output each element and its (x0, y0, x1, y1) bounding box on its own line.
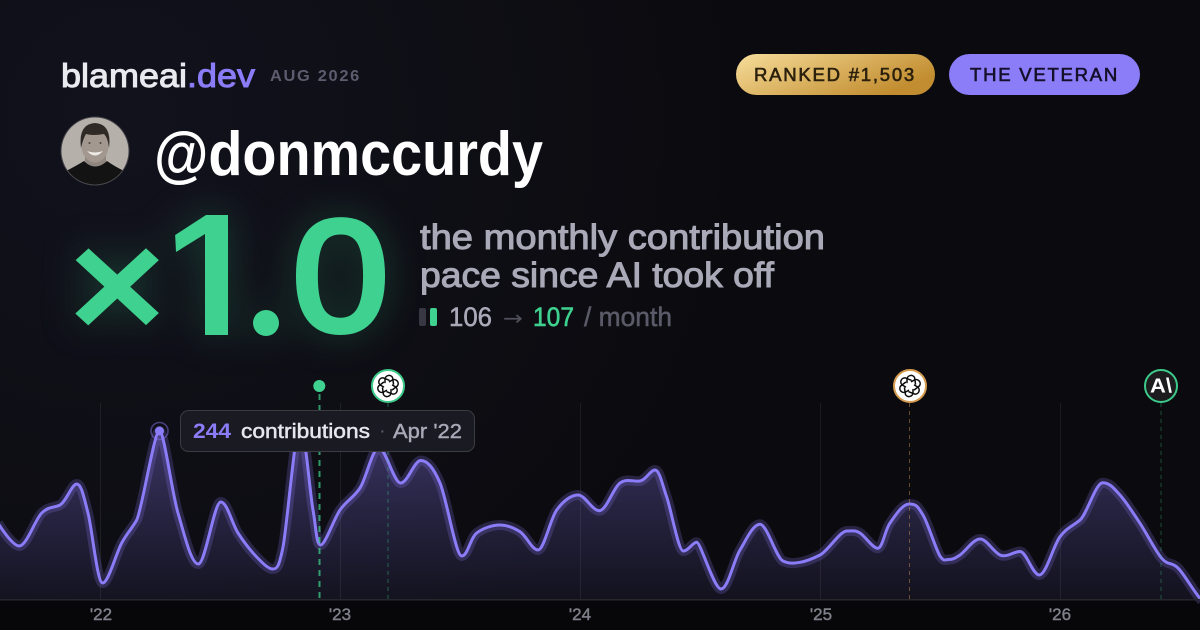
area chart: monthly contributions (0, 424, 1200, 601)
pace stats: → (503, 306, 523, 330)
multiplier: 0 (292, 188, 388, 364)
badge: rank (736, 54, 935, 95)
multiplier (73, 204, 400, 348)
pace stats: / month (584, 302, 672, 332)
tooltip: peak month: · (379, 420, 386, 442)
multiplier: 1 (166, 182, 261, 372)
pace stats: 106 (449, 302, 492, 332)
description (420, 218, 825, 295)
avatar (60, 116, 130, 186)
marker: OpenAI release 2023 (372, 370, 404, 600)
axis year labels: '26 (1049, 605, 1071, 624)
multiplier: . (238, 157, 294, 380)
tooltip: peak month: 244 (193, 420, 231, 443)
year gridlines (100, 403, 1060, 600)
pace stats: 107 (533, 302, 574, 332)
badge: archetype (949, 54, 1140, 95)
chart footer band (0, 600, 1200, 630)
axis year labels: '25 (810, 605, 832, 624)
date label: AUG 2026 (270, 68, 361, 85)
multiplier: × (68, 199, 166, 371)
tooltip: peak month: Apr '22 (393, 421, 462, 443)
axis baseline (0, 599, 1200, 600)
marker: Anthropic release (1145, 370, 1177, 600)
marker: OpenAI release 2025 (894, 370, 926, 600)
axis year labels: '23 (329, 605, 351, 624)
tooltip: peak month: contributions (241, 421, 370, 443)
axis year labels (90, 605, 1071, 624)
axis year labels: '22 (90, 605, 112, 624)
marker: AI takeoff date (313, 380, 325, 600)
badge: archetype: THE VETERAN (970, 65, 1119, 85)
description: pace since AI took off (420, 256, 774, 295)
tooltip: peak month (180, 410, 474, 452)
pace stats (419, 302, 672, 332)
wordmark: blameai .dev (61, 58, 255, 95)
username: @donmccurdy (154, 120, 543, 189)
marker: Anthropic release: A\ (1150, 376, 1172, 398)
peak marker (151, 422, 168, 440)
axis year labels: '24 (569, 605, 591, 624)
badge: rank: RANKED #1,503 (754, 65, 916, 85)
description: the monthly contribution (420, 218, 825, 257)
